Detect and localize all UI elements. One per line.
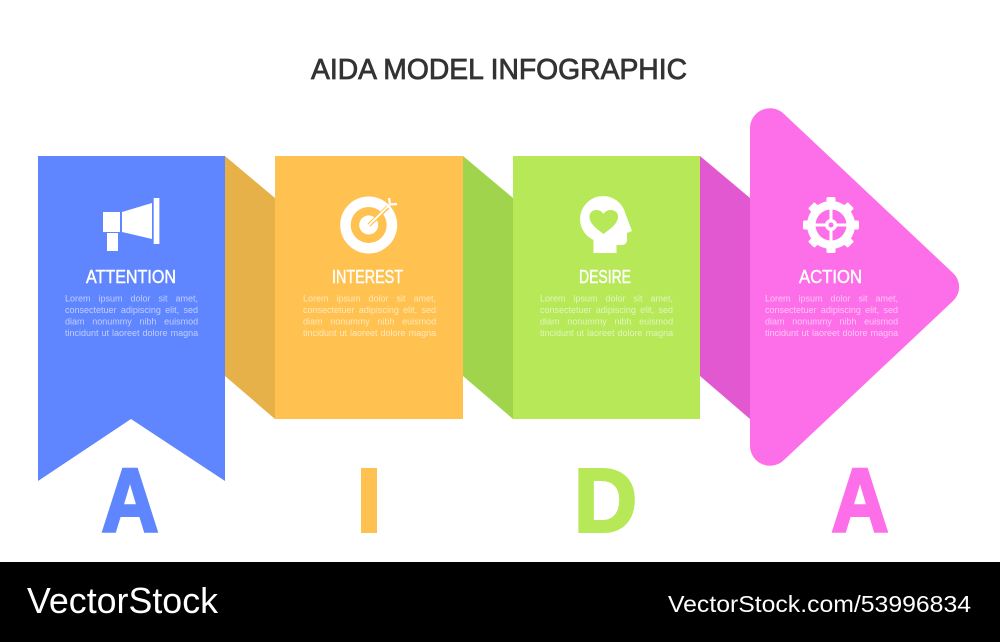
panel: action (750, 108, 959, 466)
body text: action (765, 294, 898, 338)
heading: action: ACTION (799, 267, 862, 287)
panel: interest (275, 156, 463, 419)
body text: desire: diam nonummy nibh euismod (540, 316, 673, 326)
letter I: interest: I (356, 452, 382, 552)
pink arrowhead (750, 108, 959, 466)
fold: interest to desire (463, 156, 513, 419)
body text: desire: consectetuer adipiscing elit, sed (540, 305, 673, 315)
body text: desire: Lorem ipsum dolor sit amet, (540, 294, 673, 304)
icon: head with heart (580, 196, 632, 253)
letter A: attention: A (102, 452, 158, 552)
body text: interest: Lorem ipsum dolor sit amet, (303, 294, 436, 304)
icon: gear (803, 197, 859, 253)
body text: desire (540, 294, 673, 338)
body text: action: consectetuer adipiscing elit, sed (765, 305, 898, 315)
body text: attention: Lorem ipsum dolor sit amet, (65, 294, 198, 304)
body text: attention: tincidunt ut laoreet dolore magna (65, 328, 198, 338)
letter A: action: A (832, 452, 888, 552)
body text: interest: consectetuer adipiscing elit, sed (303, 305, 436, 315)
heading: interest: INTEREST (332, 267, 403, 287)
body text: interest (303, 294, 436, 338)
body text: attention: diam nonummy nibh euismod (65, 316, 198, 326)
orange panel (275, 156, 463, 419)
footer reference: VectorStock.com/53996834 (668, 591, 971, 617)
body text: action: tincidunt ut laoreet dolore magna (765, 328, 898, 338)
footer logo: VectorStock (27, 580, 219, 621)
heading: desire: DESIRE (579, 267, 631, 287)
heading: attention: ATTENTION (86, 267, 176, 287)
footer bar (0, 562, 1000, 642)
blue ribbon (38, 156, 225, 481)
panel: attention (38, 156, 225, 481)
panel: desire (513, 156, 700, 419)
title: AIDA MODEL INFOGRAPHIC (311, 54, 687, 86)
body text: attention (65, 294, 198, 338)
fold: attention to interest (225, 156, 275, 419)
body text: attention: consectetuer adipiscing elit, sed (65, 305, 198, 315)
icon: megaphone (103, 198, 159, 251)
body text: desire: tincidunt ut laoreet dolore magna (540, 328, 673, 338)
letter D: desire: D (574, 452, 637, 552)
green panel (513, 156, 700, 419)
body text: interest: tincidunt ut laoreet dolore magna (303, 328, 436, 338)
body text: action: diam nonummy nibh euismod (765, 316, 898, 326)
icon: target with arrow (340, 196, 397, 254)
body text: interest: diam nonummy nibh euismod (303, 316, 436, 326)
body text: action: Lorem ipsum dolor sit amet, (765, 294, 898, 304)
fold: desire to action (700, 156, 750, 419)
